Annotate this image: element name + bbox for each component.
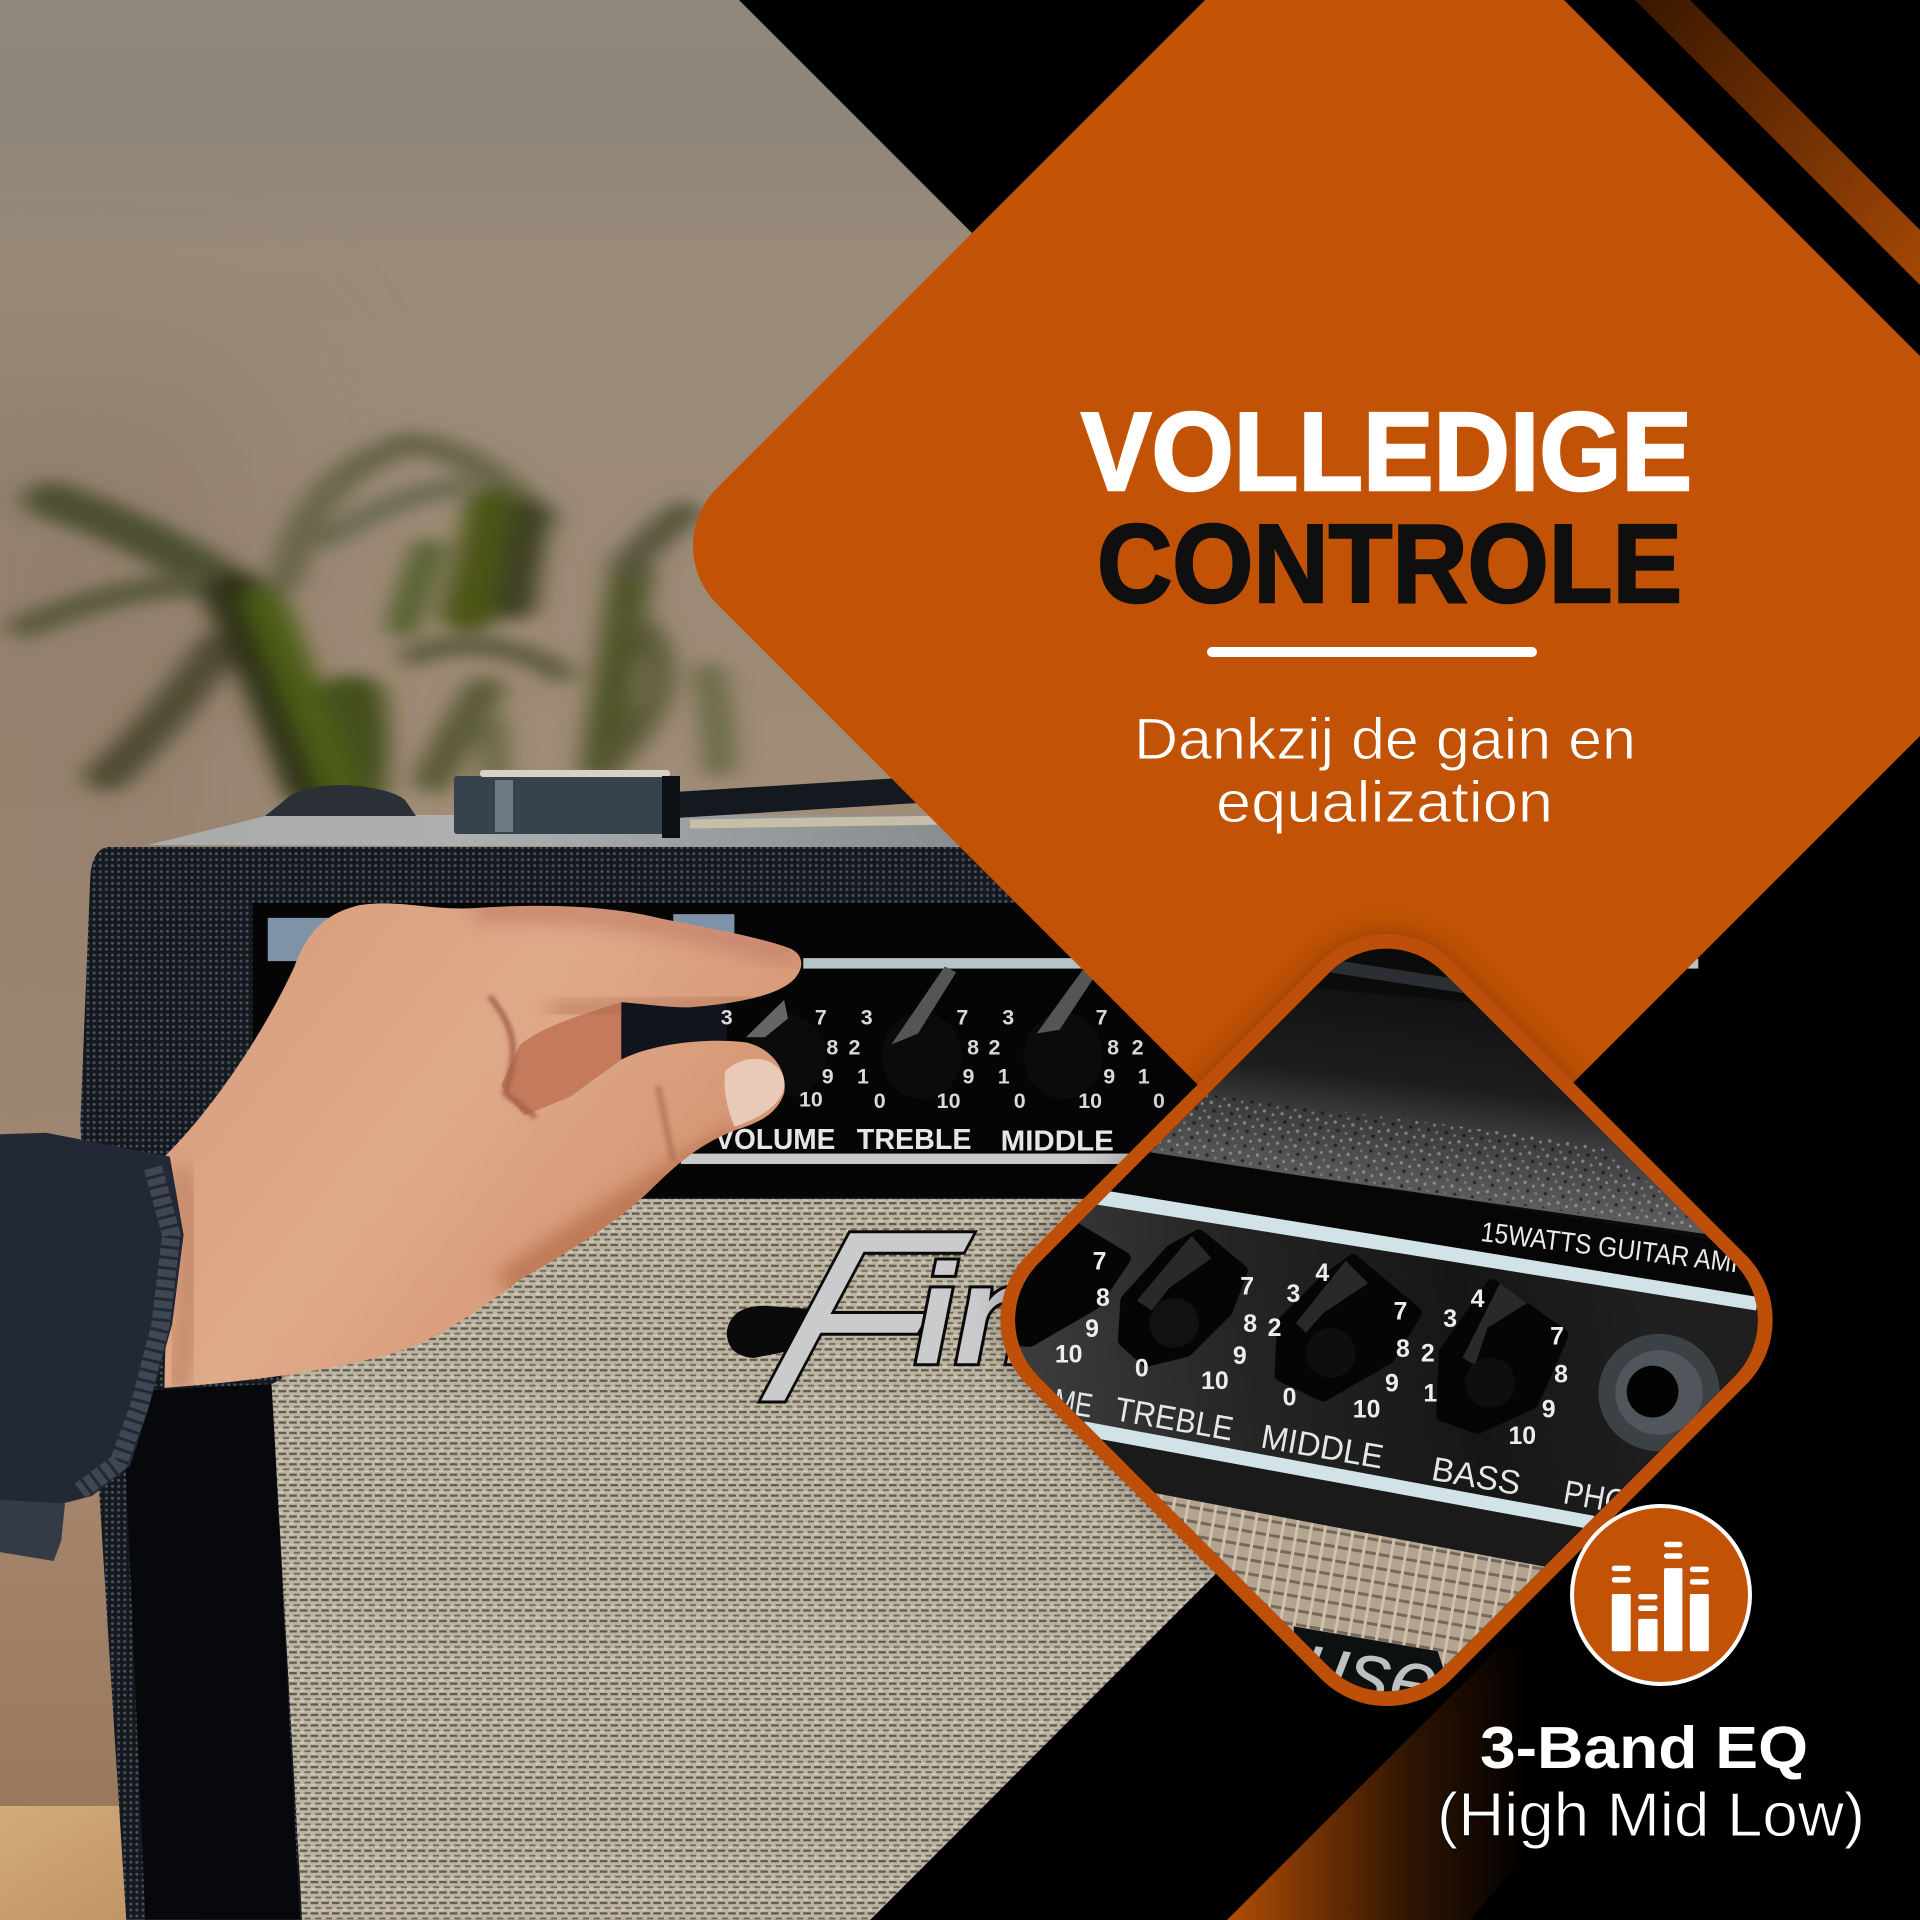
inset labels: ME — [1051, 1382, 1095, 1425]
Fine logo: F — [736, 1180, 992, 1452]
title: VOLLEDIGE: VOLLEDIGE — [1081, 390, 1692, 514]
Fine logo: ine — [914, 1236, 1124, 1394]
front panel knobs and scales: 2 — [989, 1037, 1000, 1059]
knob scales — [1055, 1248, 1568, 1450]
front panel knobs and scales: 0 — [1014, 1090, 1026, 1113]
front panel knobs and scales: 0 — [1153, 1090, 1165, 1113]
blurred plant — [26, 443, 719, 793]
knob scales: 8 — [1396, 1335, 1410, 1363]
diamond shape — [659, 0, 1920, 1271]
front panel knobs and scales: 9 — [822, 1066, 834, 1088]
tolex cabinet — [80, 847, 1084, 1920]
front panel knobs and scales: 10 — [937, 1090, 961, 1113]
knob scales: 9 — [1085, 1315, 1099, 1343]
knob scales: 2 — [1421, 1340, 1435, 1368]
knob scales: 0 — [1135, 1355, 1149, 1383]
amp handle and strap — [454, 770, 950, 838]
amplifier — [80, 847, 1698, 1920]
black band — [1090, 1151, 1766, 1303]
front panel knobs and scales: 0 — [874, 1090, 886, 1113]
knob scales: 9 — [1542, 1395, 1556, 1423]
inset photo — [1015, 948, 1758, 1692]
front panel knobs and scales: 8 — [1107, 1037, 1119, 1059]
inset border — [962, 896, 1811, 1744]
knob scales: 10 — [1353, 1395, 1380, 1423]
panel labels — [718, 1128, 1113, 1150]
inset: close-up of amp controls — [1000, 934, 1773, 1706]
title: CONTROLE: CONTROLE — [1097, 502, 1682, 626]
knob highlights — [1137, 1236, 1527, 1408]
knob scales: 8 — [1243, 1310, 1257, 1338]
front panel knobs and scales: 7 — [956, 1007, 968, 1029]
blurred wall background — [0, 0, 1000, 1920]
decorative orange strip top right — [1635, 0, 1920, 285]
front panel knobs and scales: 1 — [998, 1066, 1010, 1088]
jack socket — [1598, 1334, 1720, 1451]
front panel knobs and scales: 7 — [1096, 1007, 1108, 1029]
knob scales: 7 — [1240, 1273, 1254, 1301]
inset shadow — [962, 896, 1811, 1744]
hand — [164, 903, 801, 1392]
subtitle: Dankzij de gain en — [1134, 707, 1636, 772]
knob scales: 4 — [1315, 1259, 1329, 1287]
front panel knobs and scales: 3 — [721, 1007, 733, 1029]
inset labels: MIDDLE — [1258, 1418, 1386, 1477]
panel face — [995, 1189, 1776, 1552]
knob scales: 1 — [1423, 1380, 1437, 1408]
panel chrome strips — [681, 958, 1698, 1164]
lower panel band — [1080, 1435, 1592, 1569]
light strips — [1097, 1190, 1759, 1311]
wooden table — [0, 1806, 200, 1920]
knob scales: 9 — [1233, 1342, 1247, 1370]
front panel knobs and scales: 3 — [1002, 1007, 1014, 1029]
equalizer bars — [1612, 1542, 1709, 1651]
knob scales: 3 — [1287, 1280, 1300, 1308]
front panel knobs and scales: 9 — [963, 1066, 974, 1088]
jacket sleeve — [0, 1133, 184, 1561]
hand shading — [176, 910, 796, 1392]
knob scales: 7 — [1393, 1297, 1407, 1325]
panel labels: TREBLE — [857, 1124, 972, 1156]
knob scales: 8 — [1096, 1284, 1110, 1312]
grille — [1154, 1493, 1647, 1710]
front panel knobs and scales: 2 — [849, 1037, 860, 1059]
top dark area — [1015, 948, 1758, 1692]
knob scales: 0 — [1283, 1384, 1296, 1412]
Fine logo — [726, 1230, 1013, 1404]
tolex — [1149, 985, 1736, 1238]
inset labels: PHO — [1561, 1473, 1631, 1522]
front panel knobs and scales: 2 — [1132, 1037, 1144, 1059]
thumbnail — [725, 1059, 785, 1127]
inset labels — [1051, 1216, 1750, 1522]
inset labels: BASS — [1429, 1450, 1524, 1503]
front panel knobs and scales: 9 — [1103, 1066, 1115, 1088]
panel labels: MIDDLE — [1001, 1126, 1114, 1158]
knobs — [990, 1228, 1562, 1427]
knob scales: 10 — [1055, 1341, 1082, 1369]
decorative orange strip bottom — [1227, 1647, 1700, 1920]
knob scales: 2 — [1268, 1314, 1281, 1342]
knob scales: 10 — [1201, 1367, 1229, 1395]
speaker grille — [272, 1199, 1224, 1920]
front panel knobs and scales: 1 — [857, 1066, 869, 1088]
inset labels: TREBLE — [1112, 1390, 1236, 1449]
logo remnant: use — [1295, 1613, 1446, 1730]
front panel knobs and scales: 8 — [826, 1037, 839, 1059]
subtitle — [1134, 707, 1636, 835]
amp top knob — [265, 785, 416, 816]
knob scales: 7 — [1093, 1248, 1106, 1276]
front panel knobs and scales — [721, 966, 1165, 1113]
front panel knobs and scales: 1 — [1138, 1066, 1150, 1088]
knob scales: 3 — [1443, 1305, 1457, 1333]
orange diamond panel — [659, 0, 1920, 1271]
front panel knobs and scales: 8 — [967, 1037, 979, 1059]
knob scales: 7 — [1550, 1322, 1564, 1350]
front panel knobs and scales: 7 — [815, 1007, 827, 1029]
knob scales: 4 — [1471, 1285, 1485, 1313]
subtitle: equalization — [1216, 770, 1553, 835]
divider — [1207, 647, 1537, 657]
knob scales: 10 — [1508, 1422, 1536, 1450]
knob scales: 8 — [1554, 1361, 1568, 1389]
front panel knobs and scales: 10 — [1078, 1090, 1102, 1113]
icon: equalizer badge — [1572, 1506, 1750, 1684]
amp top surface — [148, 815, 1020, 848]
knob scales: 9 — [1385, 1370, 1399, 1398]
front panel knobs and scales: 3 — [861, 1007, 873, 1029]
label: High Mid Low: (High Mid Low) — [1437, 1781, 1865, 1850]
inset labels: 15WATTS GUITAR AMP — [1479, 1216, 1750, 1280]
control panel — [252, 903, 1247, 1198]
front panel knobs and scales: 10 — [799, 1089, 823, 1112]
panel labels: VOLUME — [715, 1124, 835, 1156]
label: 3-Band EQ: 3-Band EQ — [1480, 1715, 1808, 1781]
